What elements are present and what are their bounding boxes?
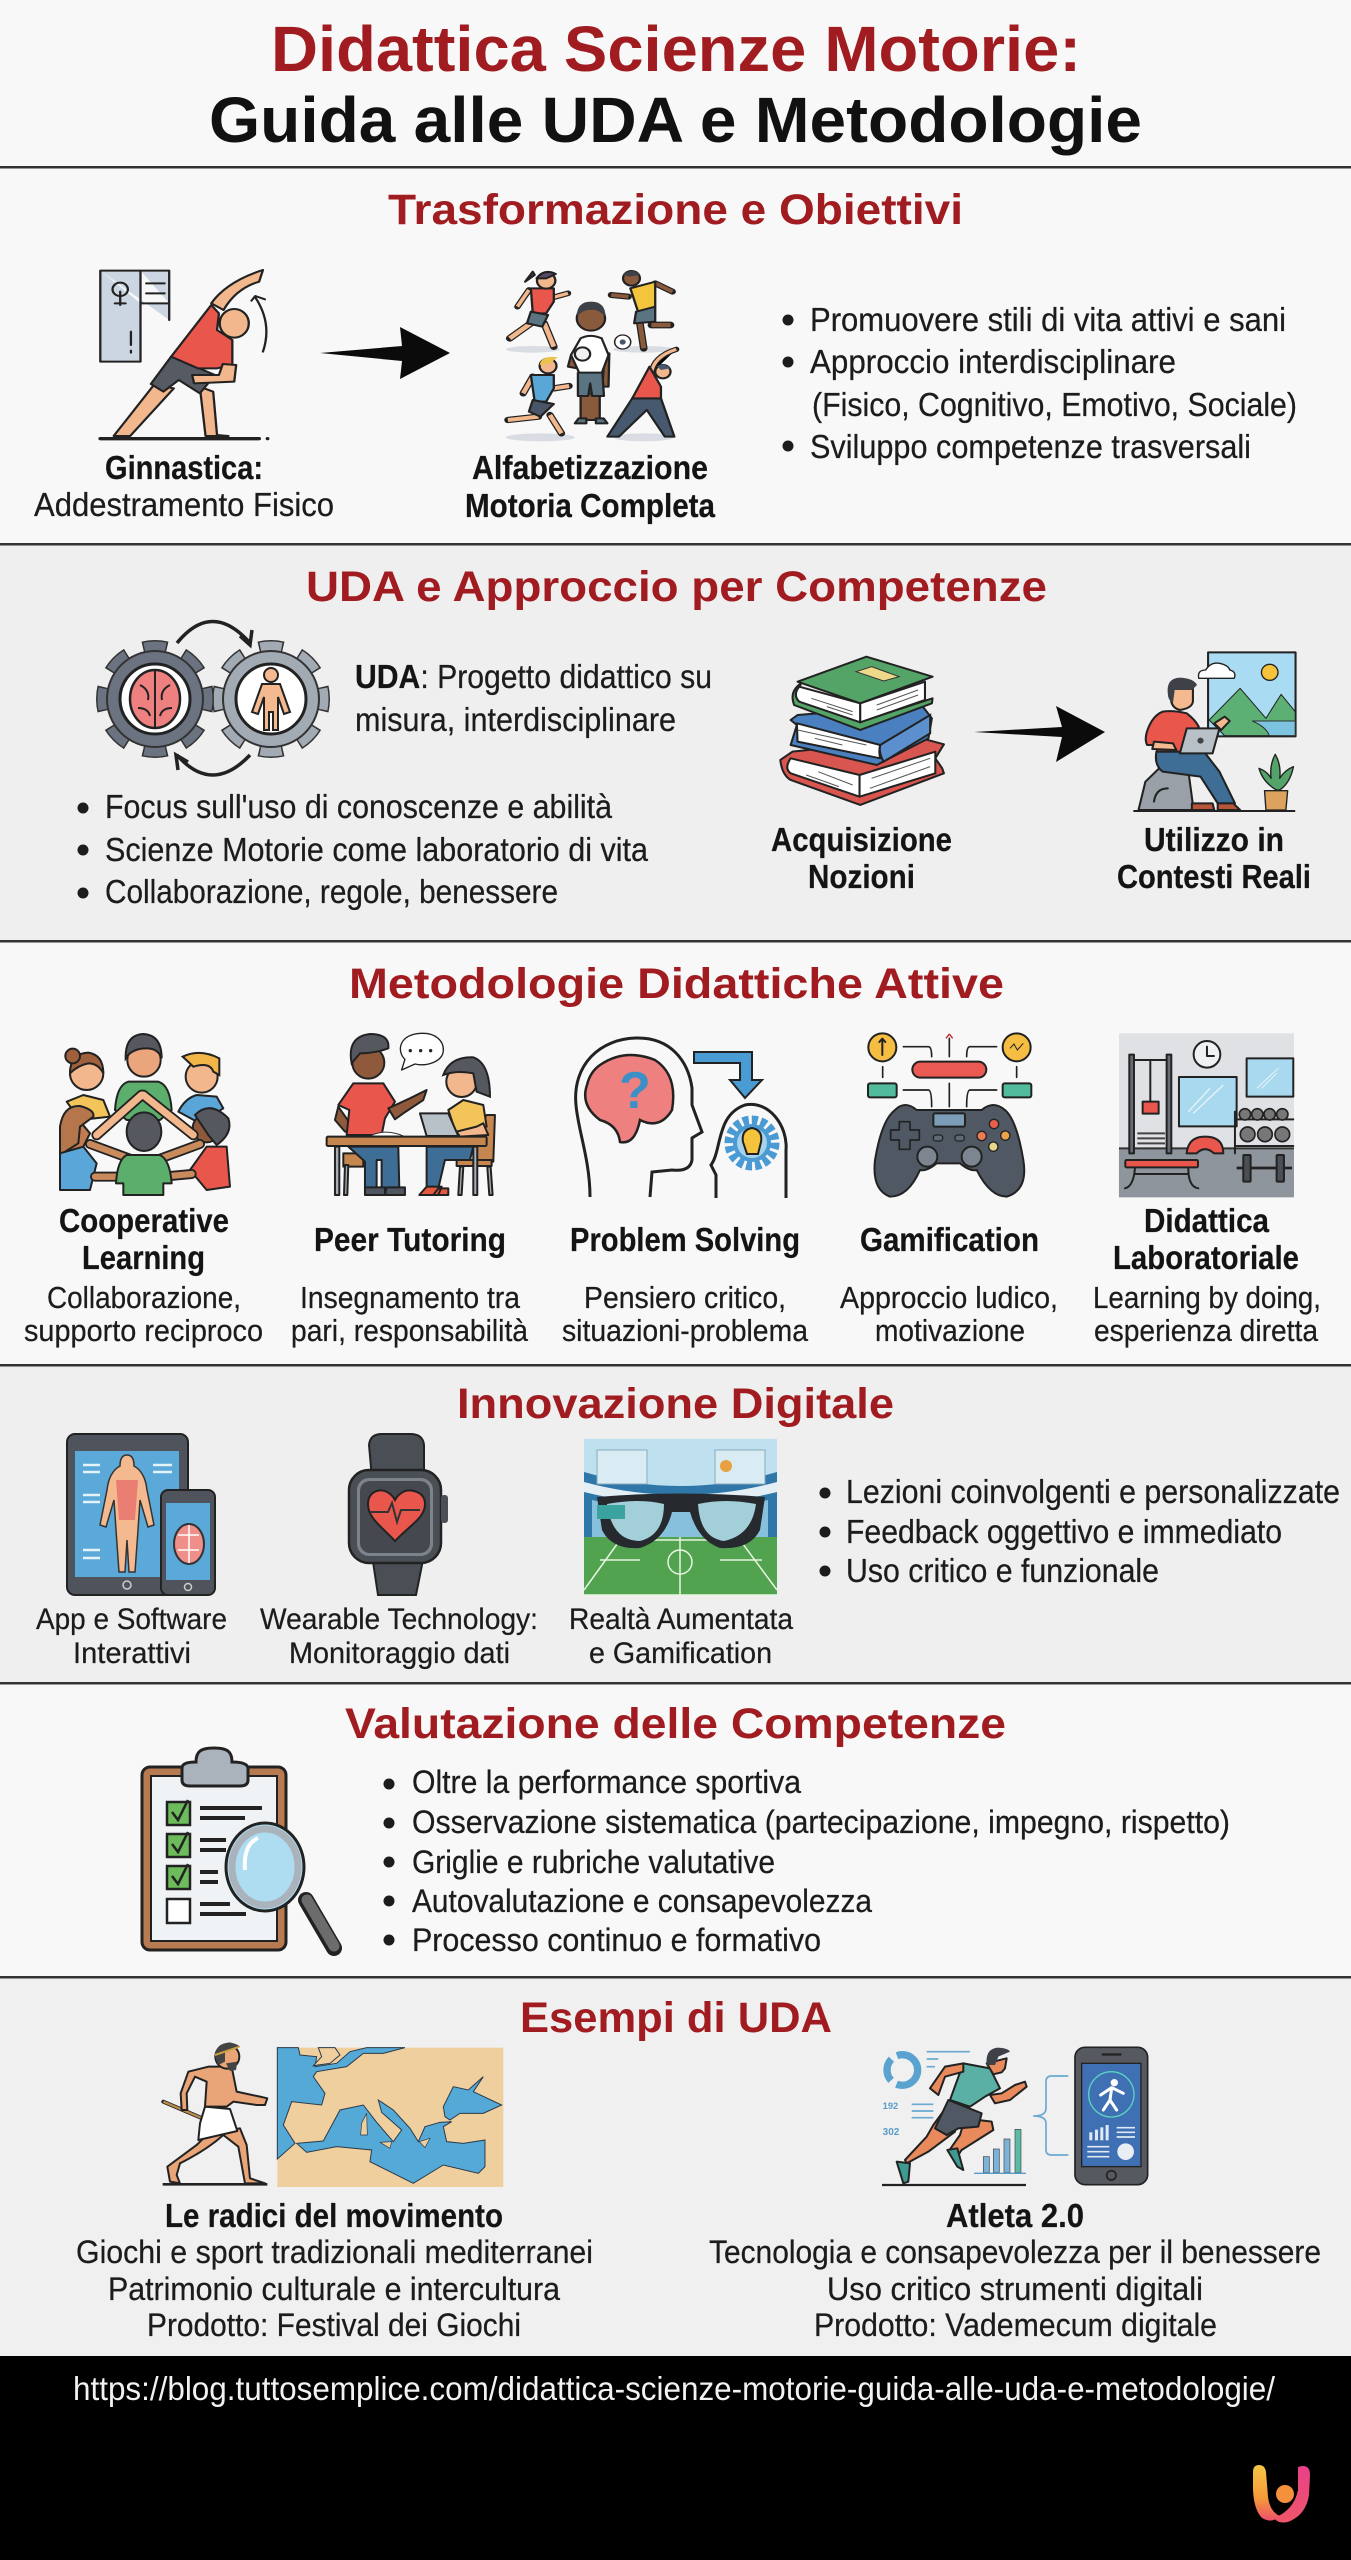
method: Cooperative Learning: Collaborazione, [47, 1280, 241, 1315]
label: Utilizzo in Contesti Reali: Utilizzo in [1144, 821, 1284, 858]
icon: clipboard with magnifier [142, 1748, 334, 1950]
icon: AR glasses over stadium [584, 1439, 777, 1595]
runner blue [508, 357, 569, 433]
bullet list: objectives: Promuovere stili di vita attivi e sani [810, 301, 1286, 338]
bullet list: digital: Feedback oggettivo e immediato [846, 1513, 1282, 1550]
label: Realtà Aumentata: e Gamification [589, 1637, 772, 1670]
center boy [568, 302, 609, 423]
source URL: https://blog.tuttosemplice.com/didattica-scienze-motorie-guida-alle-uda-e-metodologie/ [73, 2370, 1276, 2407]
icon: gears with brain and person [103, 622, 323, 775]
UDA definition [355, 658, 712, 738]
icon: runner with phone [882, 2047, 1148, 2185]
icon: brand logo [1253, 2465, 1310, 2522]
bullet list: digital [820, 1473, 1340, 1589]
method: Problem Solving [562, 1221, 809, 1348]
heading: Metodologie Didattiche Attive [349, 960, 1004, 1008]
bullet list: assessment: Oltre la performance sportiva [412, 1764, 801, 1800]
stretching figure [607, 349, 676, 437]
icon: children in motion [506, 271, 676, 441]
example: Le radici del movimento: Giochi e sport tradizionali mediterranei [76, 2234, 593, 2270]
bullet list: objectives: Sviluppo competenze trasversali [810, 428, 1251, 465]
heading: Innovazione Digitale [457, 1380, 894, 1428]
panel: Metodologie Didattiche Attive [0, 940, 1351, 1365]
UDA definition: misura, interdisciplinare [355, 701, 676, 738]
icon: tablet and phone [67, 1434, 215, 1595]
method: Problem Solving: situazioni-problema [562, 1313, 809, 1348]
method: Gamification: Approccio ludico, [840, 1280, 1058, 1315]
icon: problem solving heads [576, 1038, 786, 1198]
bullet list: assessment: Autovalutazione e consapevolezza [412, 1883, 872, 1919]
icon: stack of books [780, 657, 944, 805]
bullet list: competences: Scienze Motorie come laboratorio di vita [105, 831, 649, 868]
bullet list: assessment: Osservazione sistematica (partecipazione, impegno, rispetto) [412, 1804, 1230, 1840]
label: Alfabetizzazione [465, 449, 716, 524]
icon: runner with phone: 302 [883, 2127, 900, 2138]
arrow [974, 706, 1105, 762]
heading: UDA e Approccio per Competenze [306, 563, 1047, 611]
label: Utilizzo in Contesti Reali: Contesti Reali [1117, 858, 1311, 895]
title block [0, 0, 1351, 168]
example: Le radici del movimento [76, 2197, 593, 2343]
example: Atleta 2.0: Prodotto: Vademecum digitale [814, 2307, 1217, 2343]
panel: Innovazione Digitale [0, 1364, 1351, 1683]
label: App e Software: Interattivi [73, 1637, 191, 1670]
method: Didattica Laboratoriale: esperienza diretta [1094, 1313, 1319, 1348]
icon: ancient athlete [163, 2042, 267, 2184]
panel: Trasformazione e Obiettivi [0, 166, 1351, 544]
panel: Valutazione delle Competenze [0, 1682, 1351, 1977]
label: Acquisizione Nozioni: Nozioni [808, 858, 915, 895]
method: Peer Tutoring: Insegnamento tra [300, 1280, 521, 1315]
method: Cooperative Learning [24, 1202, 263, 1348]
method: Gamification: Gamification [860, 1221, 1039, 1258]
title line 2: Guida alle UDA e Metodologie [209, 84, 1142, 156]
label: Acquisizione Nozioni [771, 821, 952, 895]
label: Ginnastica: Addestramento Fisico [34, 486, 334, 523]
heading: Esempi di UDA [520, 1994, 832, 2042]
method: Didattica Laboratoriale: Learning by doing, [1093, 1280, 1321, 1315]
method: Problem Solving: Pensiero critico, [584, 1280, 786, 1315]
UDA definition: UDA: Progetto didattico su [355, 658, 712, 695]
icon: peer tutoring [327, 1033, 495, 1195]
label: App e Software: App e Software [36, 1603, 227, 1636]
icon: Mediterranean map [277, 2048, 503, 2187]
label: Alfabetizzazione: Alfabetizzazione [472, 449, 708, 486]
bullet list: objectives: (Fisico, Cognitivo, Emotivo, Sociale) [812, 386, 1297, 423]
bullet list: competences [78, 788, 649, 910]
label: Wearable Technology: Wearable Technology: [260, 1603, 538, 1636]
bullet list: assessment [384, 1764, 1230, 1958]
method: Peer Tutoring [291, 1221, 529, 1348]
method: Didattica Laboratoriale [1093, 1202, 1321, 1348]
arrow [320, 327, 450, 379]
method: Peer Tutoring: pari, responsabilità [291, 1313, 529, 1348]
label: Ginnastica: Ginnastica: [105, 449, 263, 486]
icon: person with laptop in real world [1133, 652, 1296, 811]
label: Wearable Technology [260, 1603, 538, 1670]
method: Cooperative Learning: supporto reciproco [24, 1313, 263, 1348]
label: Realtà Aumentata: Realtà Aumentata [569, 1603, 793, 1636]
example: Le radici del movimento: Le radici del movimento [165, 2197, 503, 2234]
icon: gym laboratory [1119, 1033, 1294, 1197]
bullet list: digital: Uso critico e funzionale [846, 1552, 1159, 1589]
method: Didattica Laboratoriale: Didattica [1144, 1202, 1270, 1239]
bullet list: objectives [782, 301, 1297, 465]
footer band [0, 2356, 1351, 2560]
label: Wearable Technology: Monitoraggio dati [289, 1637, 510, 1670]
label: Acquisizione Nozioni: Acquisizione [771, 821, 952, 858]
icon: gymnast stretching [100, 270, 269, 440]
example: Atleta 2.0: Uso critico strumenti digitali [827, 2271, 1203, 2307]
bullet list: competences: Collaborazione, regole, benessere [105, 873, 558, 910]
panel: Esempi di UDA [0, 1976, 1351, 2356]
example: Le radici del movimento: Patrimonio culturale e intercultura [108, 2271, 560, 2307]
heading: Trasformazione e Obiettivi [388, 186, 963, 234]
icon: cooperative learning group [60, 1034, 230, 1195]
method: Gamification: motivazione [875, 1313, 1025, 1348]
bullet list: assessment: Processo continuo e formativo [412, 1922, 821, 1958]
icon: runner with phone: 192 [883, 2101, 898, 2111]
method: Gamification [840, 1221, 1058, 1348]
icon: problem solving heads: ? [619, 1062, 651, 1120]
bullet list: objectives: Approccio interdisciplinare [810, 343, 1176, 380]
boy running [611, 271, 672, 349]
method: Cooperative Learning: Learning [82, 1239, 205, 1276]
example: Le radici del movimento: Prodotto: Festival dei Giochi [147, 2307, 521, 2343]
method: Problem Solving: Problem Solving [570, 1221, 800, 1258]
label: Alfabetizzazione: Motoria Completa [465, 487, 716, 524]
label: Realtà Aumentata [569, 1603, 793, 1670]
label: Utilizzo in Contesti Reali [1117, 821, 1311, 895]
heading: Valutazione delle Competenze [345, 1700, 1006, 1748]
example: Atleta 2.0 [709, 2197, 1321, 2343]
icon: smartwatch with heart [349, 1434, 448, 1595]
method: Didattica Laboratoriale: Laboratoriale [1113, 1239, 1299, 1276]
label: App e Software [36, 1603, 227, 1670]
girl running [510, 272, 568, 347]
example: Atleta 2.0: Tecnologia e consapevolezza per il benessere [709, 2234, 1321, 2270]
title line 1: Didattica Scienze Motorie: [271, 13, 1081, 85]
label: Ginnastica [34, 449, 334, 523]
icon: game controller [868, 1033, 1031, 1197]
example: Atleta 2.0: Atleta 2.0 [946, 2197, 1084, 2234]
method: Cooperative Learning: Cooperative [59, 1202, 229, 1239]
method: Peer Tutoring: Peer Tutoring [314, 1221, 506, 1258]
panel: UDA e Approccio per Competenze [0, 543, 1351, 941]
bullet list: competences: Focus sull'uso di conoscenze e abilità [105, 788, 613, 825]
bullet list: assessment: Griglie e rubriche valutative [412, 1844, 775, 1880]
